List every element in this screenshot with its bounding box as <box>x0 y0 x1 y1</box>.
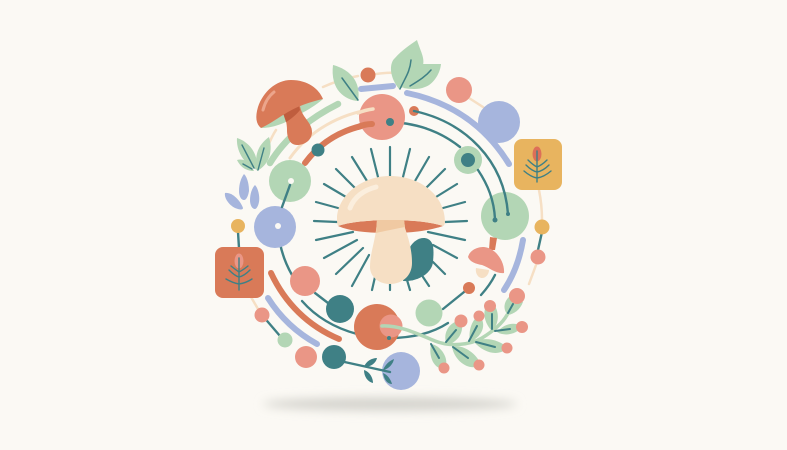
nodes top <box>386 118 394 126</box>
ring node <box>454 146 482 174</box>
blue circle bottom <box>382 352 420 390</box>
central mushroom <box>337 176 445 284</box>
stem shadow <box>283 106 300 122</box>
gills <box>338 220 443 233</box>
green arc <box>270 104 338 163</box>
green circle right with teal arcs <box>414 111 529 240</box>
outer peach ring <box>251 73 542 309</box>
arcs over salmon circle <box>358 109 373 113</box>
right berry branch <box>382 288 528 374</box>
blue arc right <box>504 240 523 290</box>
veins <box>431 304 513 358</box>
small left leaves <box>237 137 271 171</box>
orange and salmon circle <box>354 304 402 350</box>
gills <box>261 99 323 128</box>
stem <box>370 220 412 284</box>
teal connector arcs <box>238 122 542 338</box>
orange arc <box>305 124 372 163</box>
stem neck shade <box>376 220 405 233</box>
teal circle bottom with sprig <box>322 345 394 384</box>
central sun rays <box>314 147 467 290</box>
green circle left <box>269 160 311 202</box>
ground shadow <box>263 398 517 410</box>
branch <box>382 315 507 345</box>
berries <box>438 288 528 374</box>
blue arc lower left <box>268 298 317 344</box>
cap <box>337 176 445 226</box>
leaves <box>430 296 523 369</box>
orange arc lower left <box>271 273 339 339</box>
orange square icon <box>215 247 264 298</box>
stem <box>283 106 312 145</box>
cap highlight <box>350 187 376 208</box>
inner peach arc <box>290 109 373 158</box>
top left orange mushroom <box>256 80 323 145</box>
blue circle left <box>254 185 296 248</box>
blue arc top <box>361 86 393 89</box>
top double leaf <box>391 40 441 89</box>
blue arc top right <box>407 93 509 164</box>
highlight <box>263 92 274 110</box>
blue drop petals <box>225 174 259 210</box>
teal blob behind stem <box>403 238 433 281</box>
small salmon mushroom <box>468 237 504 278</box>
side nodes <box>231 219 245 233</box>
cap <box>256 80 323 128</box>
yellow square icon <box>514 139 562 190</box>
top green leaf <box>333 65 359 101</box>
salmon circle top <box>359 94 405 140</box>
